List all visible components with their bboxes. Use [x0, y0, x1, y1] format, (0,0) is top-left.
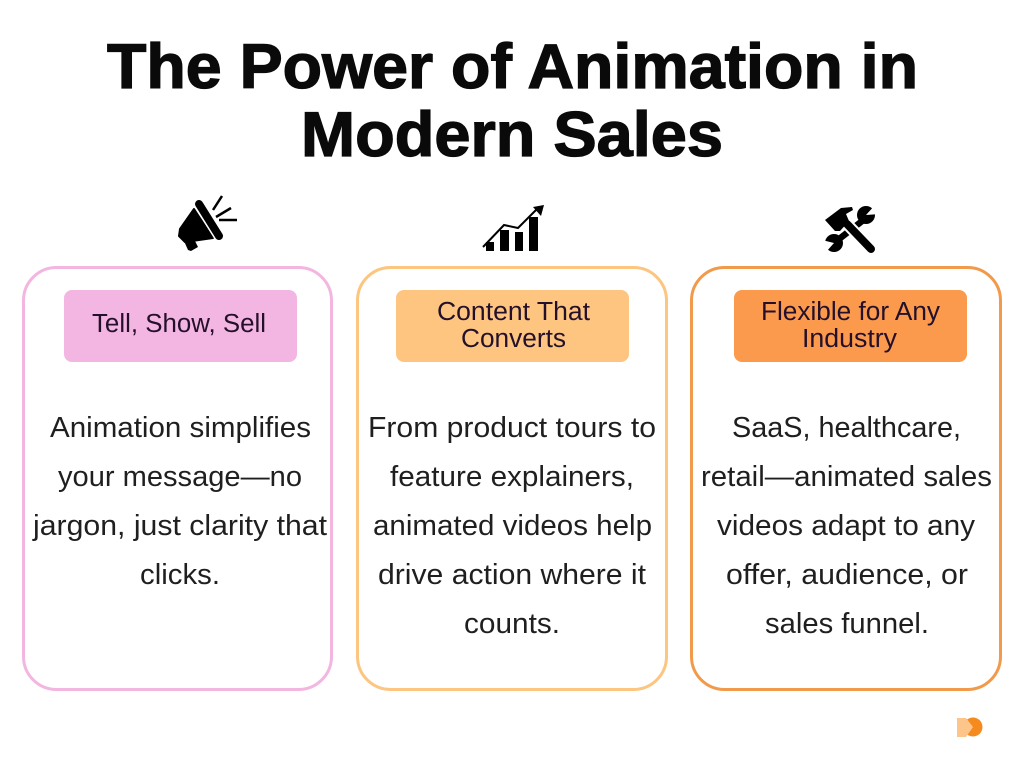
heading: Content That Converts: Converts — [461, 325, 566, 353]
title — [107, 32, 918, 170]
heading: Flexible for Any Industry: Flexible for Any — [761, 298, 940, 326]
text block: animation simplifies — [32, 412, 327, 591]
panel: Flexible for Any Industry — [692, 268, 1000, 690]
text block: industries — [701, 412, 992, 640]
heading: Tell, Show, Sell: Tell, Show, Sell — [92, 310, 266, 338]
text block: product tours — [368, 412, 656, 640]
text block: animation simplifies: Animation simplifies — [50, 412, 311, 444]
text block: product tours: counts. — [464, 608, 560, 640]
text block: industries: retail—animated sales — [701, 461, 992, 493]
heading: Content That Converts: Content That — [437, 298, 590, 326]
text block: industries: videos adapt to any — [717, 510, 976, 542]
heading: Flexible for Any Industry: Industry — [802, 325, 897, 353]
heading: Flexible for Any Industry — [734, 290, 967, 362]
text block: product tours: drive action where it — [378, 559, 646, 591]
icon: megaphone — [179, 196, 237, 251]
panel: Content That Converts — [358, 268, 666, 690]
icon: brand logo — [957, 718, 982, 737]
text block: product tours: From product tours to — [368, 412, 656, 444]
text block: animation simplifies: clicks. — [140, 559, 220, 591]
title: Modern Sales — [301, 100, 723, 170]
text block: animation simplifies: your message—no — [58, 461, 302, 493]
text block: industries: SaaS, healthcare, — [732, 412, 961, 444]
panel: Tell, Show, Sell — [24, 268, 332, 690]
text block: product tours: animated videos help — [373, 510, 652, 542]
title: The Power of Animation in — [107, 32, 918, 102]
text block: industries: offer, audience, or — [726, 559, 969, 591]
heading: Tell, Show, Sell — [64, 290, 297, 362]
text block: animation simplifies: jargon, just clarity that — [32, 510, 327, 542]
heading: Content That Converts — [396, 290, 629, 362]
text block: industries: sales funnel. — [765, 608, 929, 640]
icon: rising bar chart — [483, 205, 544, 251]
icon: hammer and wrench — [822, 204, 880, 252]
text block: product tours: feature explainers, — [390, 461, 634, 493]
